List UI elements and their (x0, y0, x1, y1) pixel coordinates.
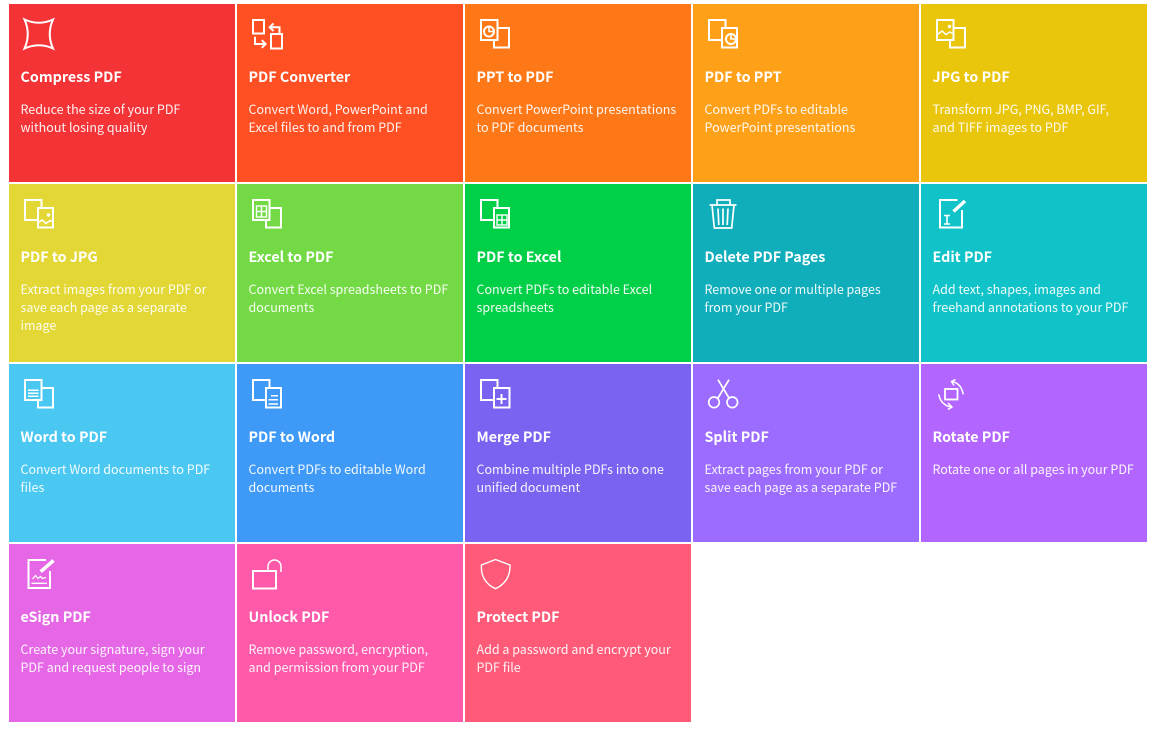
title: Merge PDF (476, 426, 551, 447)
description (20, 638, 205, 676)
description: Convert Word documents to PDF (20, 458, 210, 478)
description (248, 638, 428, 676)
panel: PDF to Excel (465, 184, 691, 362)
description: PDF file (476, 656, 521, 676)
icon: scissors (708, 379, 738, 408)
panel: PPT to PDF (465, 4, 691, 182)
title: PDF to PPT (704, 66, 782, 87)
description: documents (248, 476, 314, 496)
title: PDF to Excel (476, 246, 561, 267)
icon: pdf to word (252, 379, 282, 408)
description (20, 98, 180, 136)
description: Convert PDFs to editable Excel (476, 278, 652, 298)
icon: converter (252, 19, 283, 50)
description: Rotate one or all pages in your PDF (932, 458, 1134, 478)
title: Rotate PDF (932, 426, 1010, 447)
description: Convert Excel spreadsheets to PDF (248, 278, 448, 298)
panel: JPG to PDF (921, 4, 1147, 182)
icon: word to pdf (24, 379, 54, 408)
panel: eSign PDF (9, 544, 235, 722)
title: PDF Converter (248, 66, 350, 87)
title: PDF to Word (248, 426, 335, 447)
description: spreadsheets (476, 296, 554, 316)
description: Convert PowerPoint presentations (476, 98, 676, 118)
icon: compress (22, 18, 55, 50)
icon: merge (480, 379, 510, 408)
description: image (20, 314, 56, 334)
panel: Split PDF (693, 364, 919, 542)
description: save each page as a separate (20, 296, 187, 316)
description: Remove one or multiple pages (704, 278, 881, 298)
title: PDF to JPG (20, 246, 98, 267)
panel: Word to PDF (9, 364, 235, 542)
description: to PDF documents (476, 116, 583, 136)
description: and permission from your PDF (248, 656, 425, 676)
description (248, 278, 448, 316)
description (248, 458, 426, 496)
icon: edit (939, 199, 966, 228)
description: without losing quality (20, 116, 147, 136)
title: Delete PDF Pages (704, 246, 825, 267)
title: Protect PDF (476, 606, 559, 627)
panel: PDF to Word (237, 364, 463, 542)
description (248, 98, 428, 136)
description: and TIFF images to PDF (932, 116, 1068, 136)
title: Compress PDF (20, 66, 122, 87)
title: Split PDF (704, 426, 769, 447)
panel: Rotate PDF (921, 364, 1147, 542)
description (932, 278, 1128, 316)
title: JPG to PDF (932, 66, 1010, 87)
description: Transform JPG, PNG, BMP, GIF, (932, 98, 1109, 118)
description (20, 458, 210, 496)
description: documents (248, 296, 314, 316)
icon: pdf to jpg (24, 199, 54, 228)
description: Extract images from your PDF or (20, 278, 206, 298)
description (476, 458, 664, 496)
description (704, 278, 881, 316)
description: Remove password, encryption, (248, 638, 428, 658)
description: Excel files to and from PDF (248, 116, 402, 136)
icon: pdf to excel (480, 199, 510, 228)
description (476, 278, 652, 316)
icon: trash (710, 199, 736, 229)
icon: jpg to pdf (936, 19, 966, 48)
icon: esign (28, 559, 55, 589)
description (476, 98, 676, 136)
description: Reduce the size of your PDF (20, 98, 180, 118)
description (704, 458, 897, 496)
description: Convert Word, PowerPoint and (248, 98, 428, 118)
description: freehand annotations to your PDF (932, 296, 1128, 316)
description: from your PDF (704, 296, 788, 316)
icon: open padlock (252, 559, 282, 590)
title: Unlock PDF (248, 606, 329, 627)
icon: ppt to pdf (480, 19, 510, 48)
description: Add a password and encrypt your (476, 638, 671, 658)
panel: Unlock PDF (237, 544, 463, 722)
icon: rotate (938, 378, 964, 410)
description: unified document (476, 476, 580, 496)
description (932, 98, 1109, 136)
title: Word to PDF (20, 426, 107, 447)
panel: PDF Converter (237, 4, 463, 182)
description: Convert PDFs to editable (704, 98, 848, 118)
panel: Edit PDF (921, 184, 1147, 362)
title: PPT to PDF (476, 66, 554, 87)
description: Convert PDFs to editable Word (248, 458, 426, 478)
description: PowerPoint presentations (704, 116, 855, 136)
panel: Excel to PDF (237, 184, 463, 362)
title: eSign PDF (20, 606, 91, 627)
icon: shield (480, 558, 511, 590)
title: Edit PDF (932, 246, 992, 267)
panel: PDF to PPT (693, 4, 919, 182)
panel: PDF to JPG (9, 184, 235, 362)
description (20, 278, 206, 334)
title: Excel to PDF (248, 246, 333, 267)
description (704, 98, 855, 136)
panel: Protect PDF (465, 544, 691, 722)
description: Combine multiple PDFs into one (476, 458, 664, 478)
icon: excel to pdf (252, 199, 282, 228)
description (476, 638, 671, 676)
panel: Compress PDF (9, 4, 235, 182)
panel: Merge PDF (465, 364, 691, 542)
panel: Delete PDF Pages (693, 184, 919, 362)
icon: pdf to ppt (708, 19, 738, 48)
description: PDF and request people to sign (20, 656, 201, 676)
description: files (20, 476, 44, 496)
description: save each page as a separate PDF (704, 476, 897, 496)
description: Create your signature, sign your (20, 638, 205, 658)
description: Add text, shapes, images and (932, 278, 1101, 298)
description: Extract pages from your PDF or (704, 458, 883, 478)
